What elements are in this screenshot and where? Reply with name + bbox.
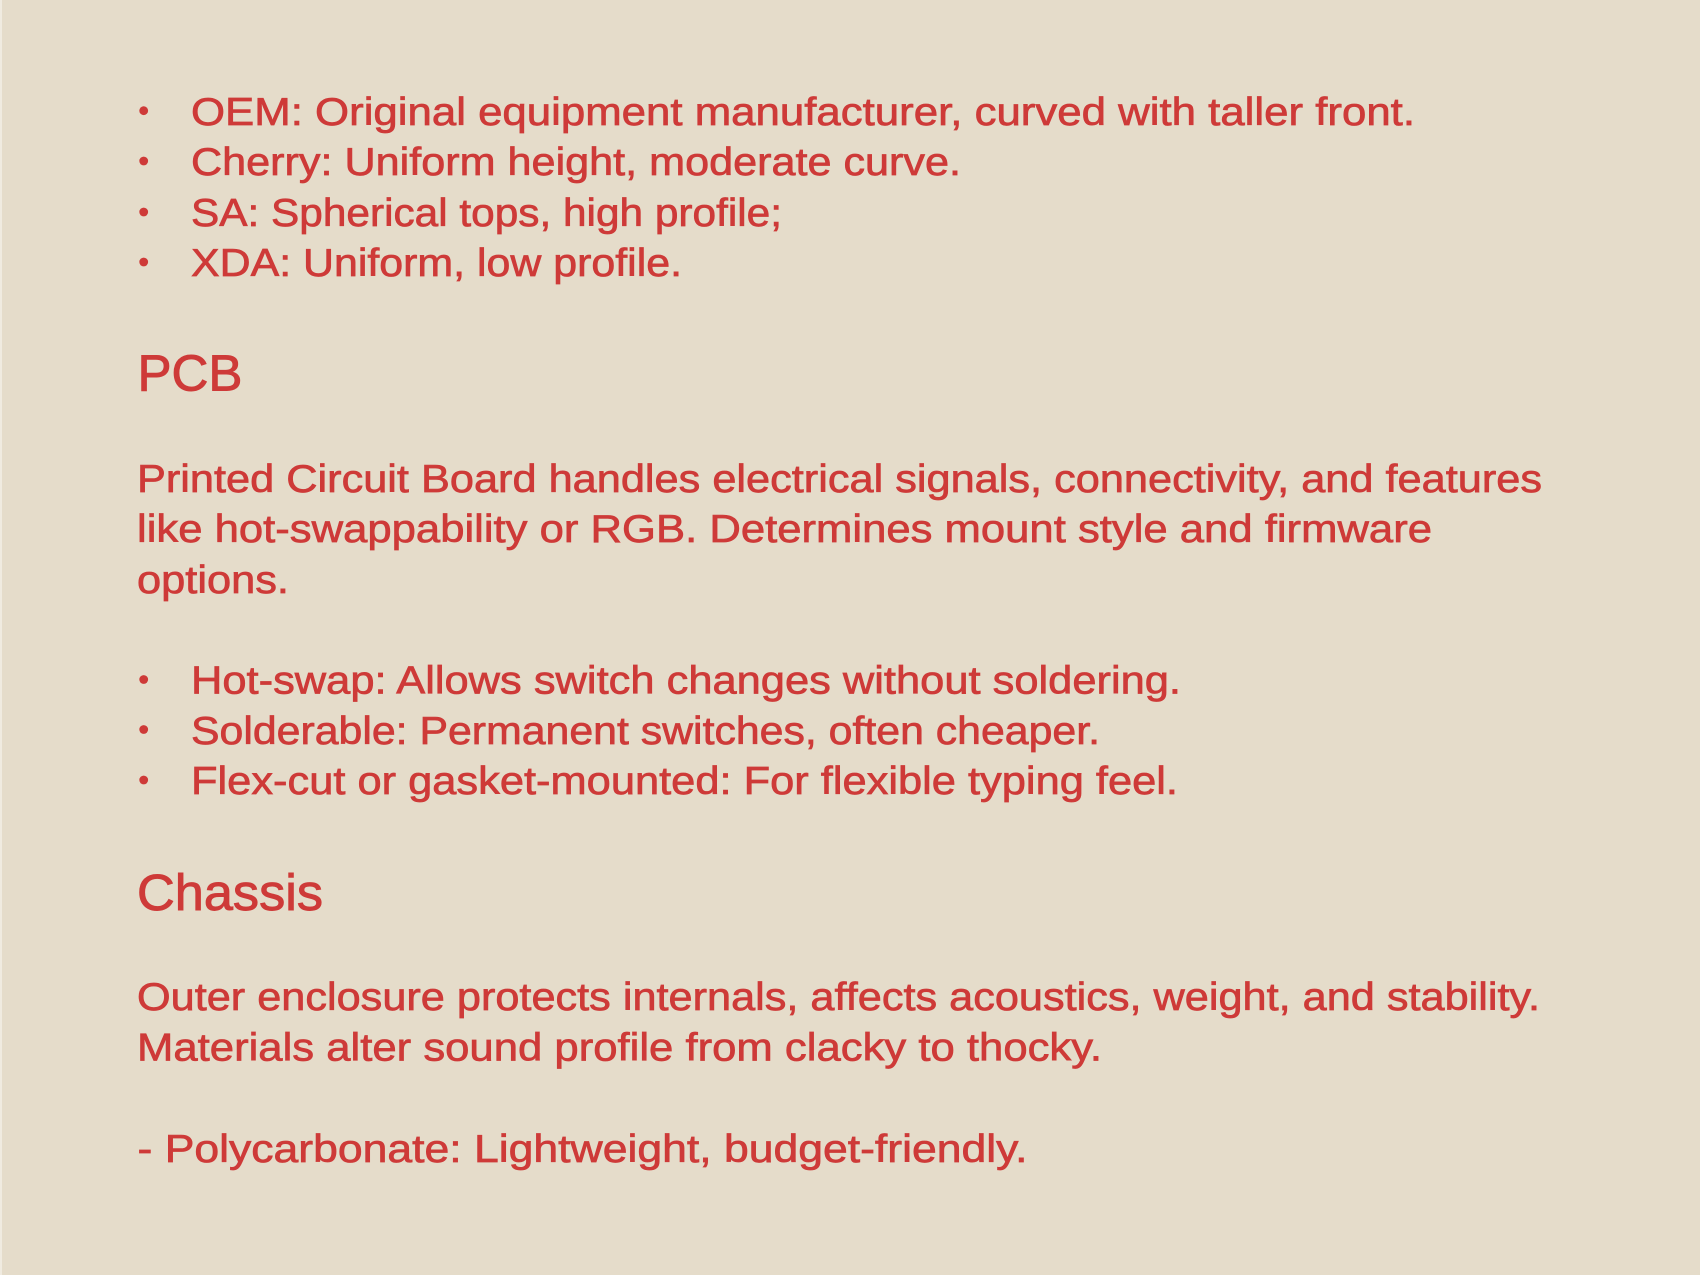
bullet list: PCB types (139, 660, 1181, 803)
paragraph: Chassis description: Outer enclosure protects internals, affects acoustics, weight, and stability. (137, 976, 1540, 1019)
paragraph: Chassis description: Materials alter sound profile from clacky to thocky. (137, 1026, 1102, 1070)
bullet list: PCB types: Hot-swap: Allows switch changes without soldering. (191, 660, 1181, 702)
heading: PCB: PCB (138, 345, 242, 402)
paragraph: PCB description: like hot-swappability or RGB. Determines mount style and firmware (137, 508, 1432, 551)
bullet list: keycap profiles (139, 91, 1415, 285)
paragraph: PCB description: Printed Circuit Board handles electrical signals, connectivity, and features (137, 458, 1542, 501)
bullet list: keycap profiles: OEM: Original equipment manufacturer, curved with taller front. (191, 91, 1415, 134)
paragraph: PCB description (137, 458, 1542, 602)
heading: Chassis: Chassis (137, 864, 323, 921)
bullet list: keycap profiles: Cherry: Uniform height, moderate curve. (191, 141, 961, 184)
bullet list: PCB types: Flex-cut or gasket-mounted: For flexible typing feel. (191, 760, 1178, 803)
list item: Polycarbonate: - Polycarbonate: Lightweight, budget-friendly. (138, 1128, 1028, 1171)
paragraph: Chassis description (137, 976, 1540, 1070)
bullet list: PCB types: Solderable: Permanent switches, often cheaper. (191, 710, 1100, 753)
bullet list: keycap profiles: SA: Spherical tops, high profile; (191, 192, 782, 235)
paragraph: PCB description: options. (137, 559, 289, 602)
bullet list: keycap profiles: XDA: Uniform, low profile. (191, 242, 682, 285)
